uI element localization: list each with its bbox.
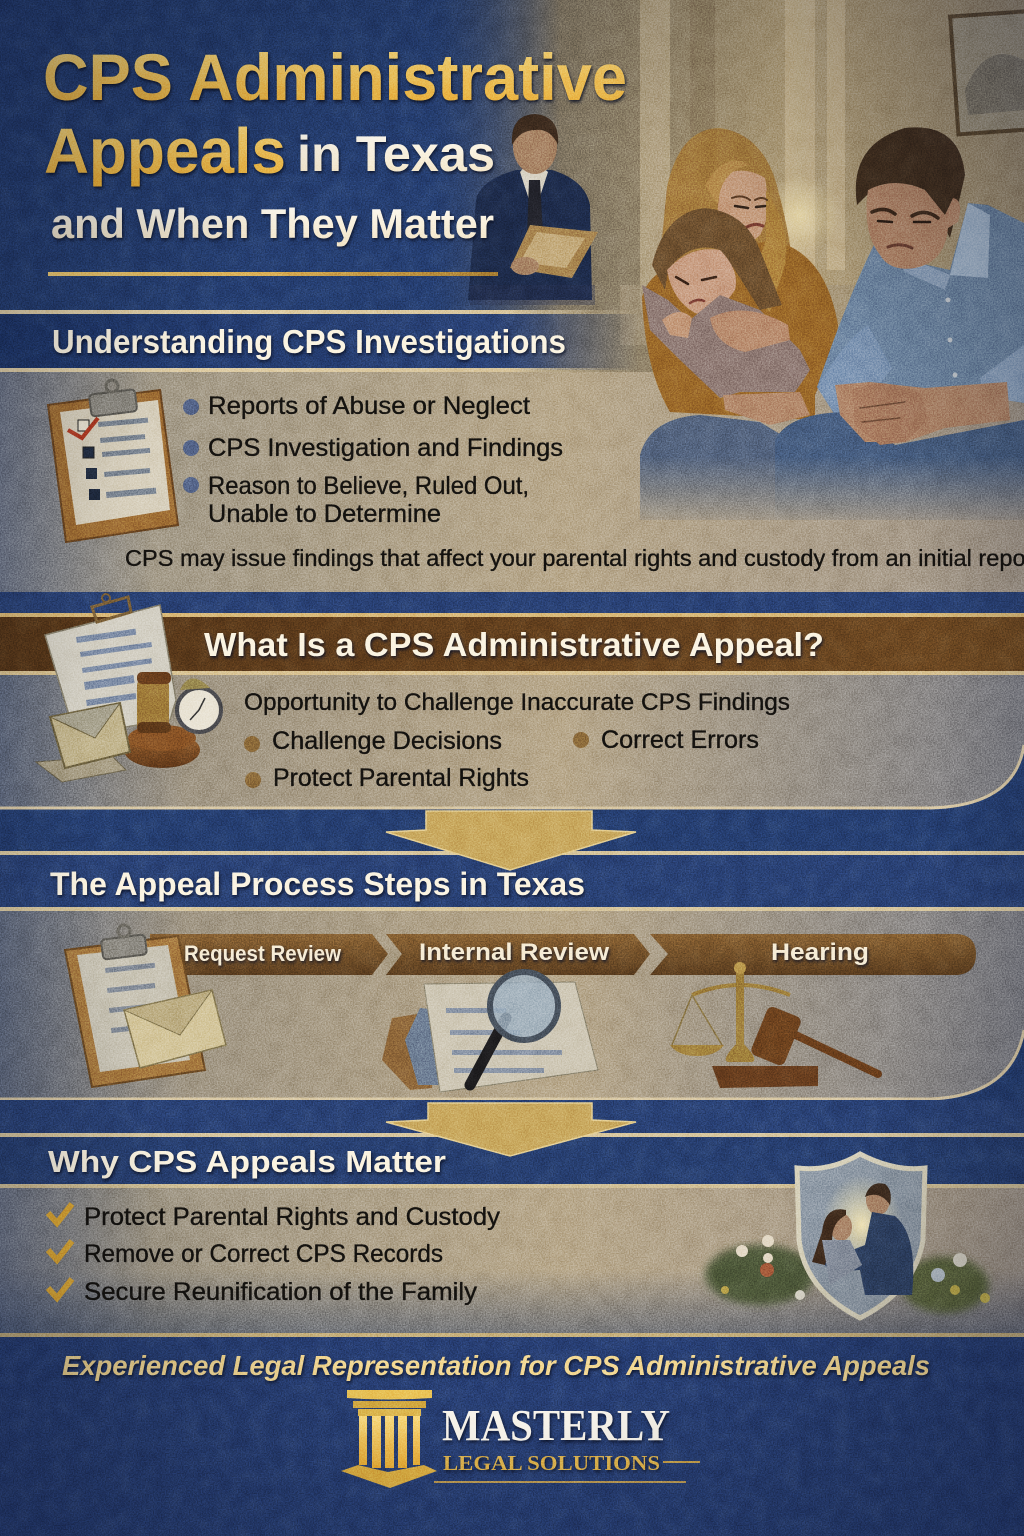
logo: Masterly Legal Solutions: LEGAL SOLUTIONS [443, 1451, 660, 1475]
icon: scales and gavel [670, 962, 878, 1088]
text: findings note: CPS may issue findings that affect your parental rights and custody from an initial report [125, 545, 1024, 571]
step 2: internal review: Internal Review [419, 939, 609, 966]
icon: gold pillar [341, 1390, 437, 1488]
band: blue process heading [0, 851, 1024, 912]
wordmark: MASTERLY [442, 1401, 670, 1450]
woman [642, 128, 838, 420]
list: investigation bullets: Reason to Believe, Ruled Out, [208, 472, 529, 500]
child [642, 208, 810, 425]
list: investigation bullets: Unable to Determine [208, 500, 441, 528]
tagline: Experienced Legal Representation for CPS Administrative Appeals [62, 1350, 930, 1381]
title: in Texas [297, 126, 495, 182]
illustration: lawyer with clipboard [468, 114, 598, 305]
arrow: down to process steps [386, 811, 636, 870]
panel: what is an appeal [0, 674, 1024, 808]
icon: documents, gavel, clock and envelope [36, 594, 221, 782]
man [775, 127, 1024, 520]
title: Appeals [44, 115, 286, 187]
icon: clipboard with checklist [48, 380, 178, 542]
title: and When They Matter [51, 200, 494, 247]
step 1: request review [150, 934, 388, 975]
woman jeans [640, 415, 790, 520]
list: investigation bullets [183, 392, 563, 528]
list: reasons with checkmarks: Protect Parental Rights and Custody [84, 1203, 501, 1231]
list: appeal opportunities: Correct Errors [601, 726, 759, 754]
list: reasons with checkmarks: Remove or Correct CPS Records [84, 1240, 443, 1268]
heading: why CPS appeals matter: Why CPS Appeals Matter [48, 1144, 446, 1179]
band: blue separator [0, 592, 1024, 614]
list: appeal opportunities [244, 689, 790, 792]
illustration: flowers [705, 1235, 990, 1313]
logo: Masterly Legal Solutions [341, 1390, 700, 1488]
list: investigation bullets: Reports of Abuse or Neglect [208, 392, 530, 420]
heading band: what is an appeal [0, 613, 1024, 675]
icon: documents with magnifier [382, 972, 598, 1092]
band: why appeals matter heading [0, 1100, 1024, 1188]
background: room behind family [430, 0, 1024, 600]
panel: process steps [0, 911, 1024, 1099]
heading: understanding CPS investigations: Understanding CPS Investigations [52, 323, 566, 360]
icon: shield with parent and child [797, 1154, 925, 1318]
panel: footer [0, 1333, 1024, 1536]
framed picture on wall [950, 11, 1024, 134]
band: understanding heading band [0, 310, 640, 372]
panel: why appeals matter [0, 1188, 1024, 1335]
title: CPS Administrative [43, 40, 627, 114]
list: reasons with checkmarks [48, 1203, 501, 1306]
step 3: hearing: Hearing [771, 939, 869, 966]
step 2: internal review [386, 934, 650, 975]
list: reasons with checkmarks: Secure Reunification of the Family [84, 1278, 478, 1306]
step 1: request review: Request Review [184, 941, 342, 966]
list: appeal opportunities: Protect Parental Rights [273, 764, 529, 792]
illustration: worried family [640, 127, 1024, 520]
panel: understanding background [0, 372, 1024, 592]
list: investigation bullets: CPS Investigation and Findings [208, 434, 563, 462]
icon: clipboard and envelope [65, 925, 226, 1087]
title [43, 40, 627, 247]
list: appeal opportunities: Challenge Decisions [272, 727, 502, 755]
heading: appeal process steps: The Appeal Process Steps in Texas [50, 866, 585, 902]
list: appeal opportunities: Opportunity to Challenge Inaccurate CPS Findings [244, 689, 790, 716]
heading band: what is an appeal: What Is a CPS Administrative Appeal? [204, 626, 824, 663]
arrow: down to why appeals matter [386, 1103, 636, 1156]
step 3: hearing [650, 934, 976, 975]
